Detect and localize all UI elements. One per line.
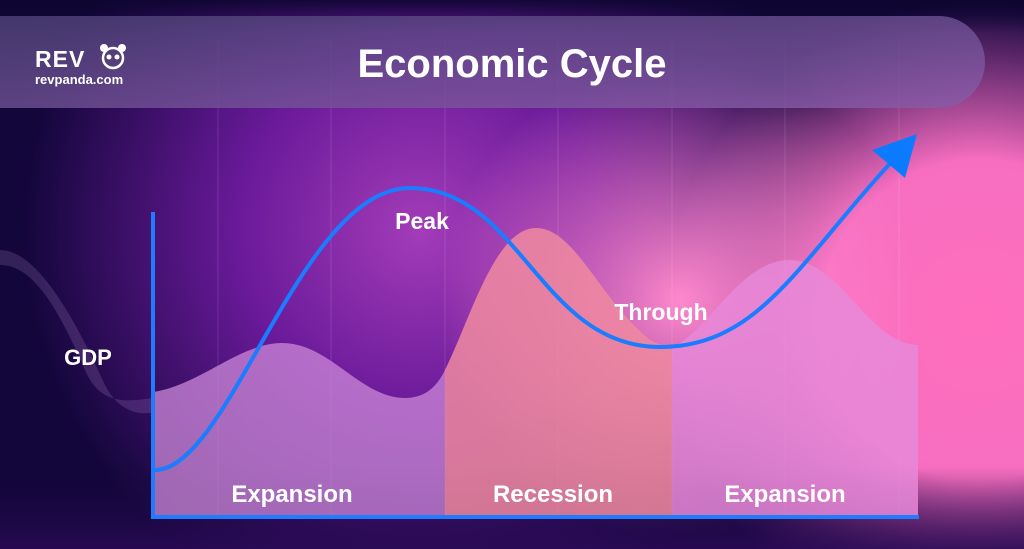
panel: expansion right area [672, 260, 918, 517]
label: Through: Through [614, 299, 708, 325]
grid lines [218, 40, 899, 517]
label: Peak: Peak [395, 208, 449, 234]
label: Expansion right: Expansion [724, 481, 846, 508]
label: Expansion: Expansion [231, 481, 353, 508]
label: Recession: Recession [493, 481, 613, 508]
panel: recession area [445, 228, 672, 517]
logo: REV [35, 46, 85, 72]
axes [151, 212, 919, 519]
title: Economic Cycle [357, 42, 667, 86]
curve with arrow [155, 134, 917, 470]
logo [35, 44, 126, 87]
logo: revpanda.com [35, 72, 123, 87]
panel: expansion left area [153, 343, 445, 517]
header bar [0, 16, 985, 108]
label: GDP: GDP [64, 345, 112, 370]
